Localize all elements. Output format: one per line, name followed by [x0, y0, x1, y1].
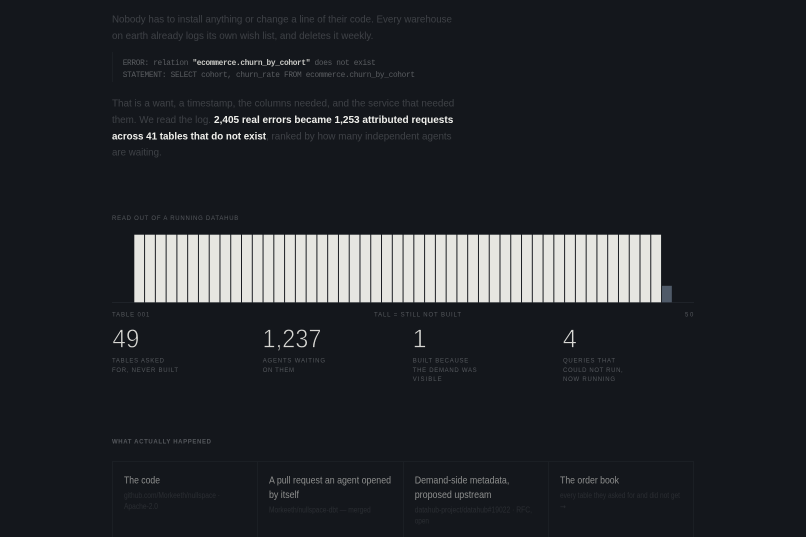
- section heading: what happened: WHAT ACTUALLY HAPPENED: [112, 440, 212, 446]
- card: the code: github.com/Morkeeth/nullspace ·: [124, 491, 220, 500]
- explanatory paragraph: them. We read the log.: [112, 115, 211, 126]
- explanatory paragraph: [112, 99, 455, 159]
- card: the code: The code: [124, 476, 160, 486]
- stat: 4 queries: NOW RUNNING: [563, 377, 615, 383]
- stat: 4 queries: COULD NOT RUN,: [563, 368, 623, 374]
- stat: 4 queries: 4: [563, 325, 577, 353]
- stat: 49 tables: [112, 325, 178, 374]
- code block: error log: ERROR: relation "ecommerce.churn_by_cohort" does not exist: [123, 60, 376, 68]
- card: demand-side metadata: open: [415, 516, 429, 525]
- intro paragraph: on earth already logs its own wish list, and deletes it weekly.: [112, 31, 373, 42]
- chart axis labels: TABLE 001: [112, 313, 150, 319]
- intro paragraph: Nobody has to install anything or change a line of their code. Every warehouse: [112, 15, 452, 26]
- chart axis labels: [112, 313, 694, 319]
- stat: 1 built: VISIBLE: [413, 377, 442, 383]
- stat: 49 tables: 49: [112, 325, 139, 353]
- intro paragraph: [112, 15, 452, 42]
- card: the order book: [560, 476, 681, 511]
- chart axis labels: TALL = STILL NOT BUILT: [374, 313, 461, 319]
- card: the code: Apache-2.0: [124, 502, 158, 511]
- card: the code: [124, 476, 220, 511]
- stat: 1 built: BUILT BECAUSE: [413, 358, 468, 364]
- stat: 1 built: [412, 325, 477, 383]
- stat: 4 queries: QUERIES THAT: [563, 358, 615, 364]
- card: the order book: →: [560, 503, 566, 511]
- explanatory paragraph: That is a want, a timestamp, the columns needed, and the service that needed: [112, 99, 455, 110]
- stat: 1,237 agents: AGENTS WAITING: [263, 358, 325, 364]
- card: pull request: A pull request an agent opened: [269, 476, 391, 486]
- bar chart: tables: [112, 235, 694, 303]
- stat: 1 built: 1: [412, 325, 427, 353]
- card: demand-side metadata: datahub-project/datahub#19022 · RFC,: [415, 506, 532, 514]
- card: the order book: every table they asked for and did not get: [560, 491, 681, 500]
- card: pull request: [269, 476, 391, 514]
- card: the order book: The order book: [560, 476, 620, 486]
- card: demand-side metadata: [415, 476, 532, 525]
- stat: 49 tables: FOR, NEVER BUILT: [112, 368, 178, 374]
- card: demand-side metadata: proposed upstream: [415, 490, 492, 501]
- card grid: [112, 462, 694, 537]
- stat: 4 queries: [563, 325, 623, 383]
- stat: 1,237 agents: [262, 325, 325, 374]
- code block: error log: STATEMENT: SELECT cohort, churn_rate FROM ecommerce.churn_by_cohort: [123, 72, 415, 80]
- code block: error log: [112, 52, 415, 82]
- stat: 1,237 agents: ON THEM: [263, 368, 294, 374]
- explanatory paragraph: , ranked by how many independent agents: [266, 131, 452, 142]
- explanatory paragraph: across 41 tables that do not exist: [112, 131, 266, 142]
- explanatory paragraph: are waiting.: [112, 148, 162, 159]
- explanatory paragraph: 2,405 real errors became 1,253 attributed requests: [214, 115, 454, 126]
- card: demand-side metadata: Demand-side metadata,: [415, 476, 509, 486]
- card: pull request: Morkeeth/nullspace-dbt — merged: [269, 506, 371, 514]
- card: pull request: by itself: [269, 490, 299, 501]
- stat: 1,237 agents: 1,237: [262, 325, 322, 353]
- stat: 49 tables: TABLES ASKED: [112, 358, 165, 364]
- section heading: chart: READ OUT OF A RUNNING DATAHUB: [112, 216, 238, 222]
- stat: 1 built: THE DEMAND WAS: [413, 368, 477, 374]
- chart axis labels: 50: [685, 313, 694, 319]
